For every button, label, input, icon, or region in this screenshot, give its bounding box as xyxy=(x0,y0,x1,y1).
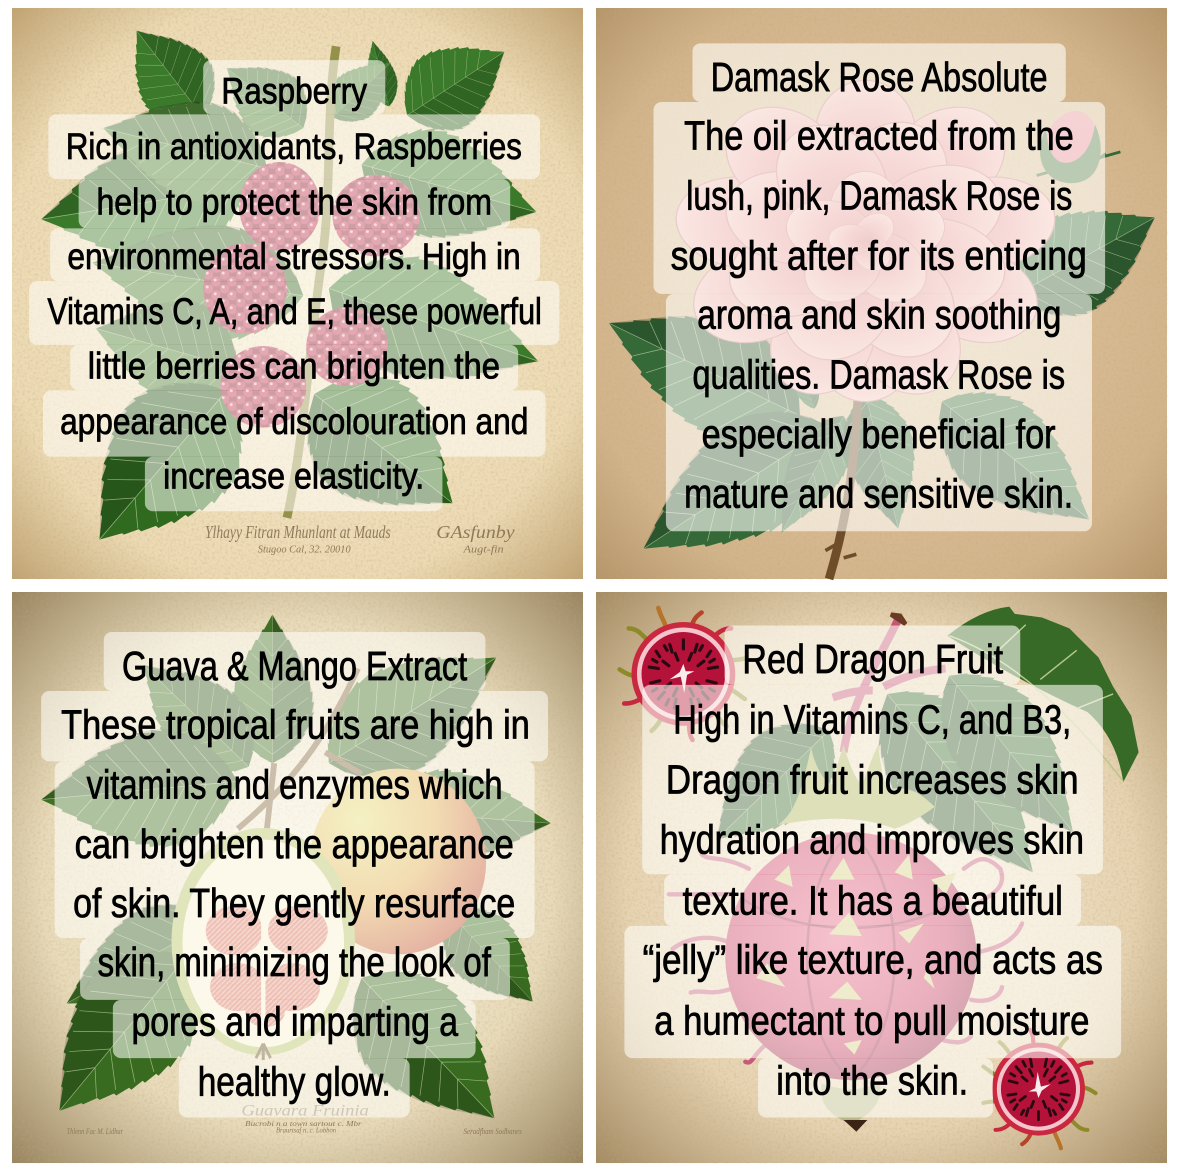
body text: raspberry: environmental stressors. High in xyxy=(67,235,521,277)
paper texture xyxy=(596,8,1167,579)
body text: damask rose: mature and sensitive skin. xyxy=(684,471,1073,517)
caption: plate inscription: Guavara Fruinia xyxy=(241,1103,369,1120)
caption: engraved signature xyxy=(205,522,516,555)
body text: red dragon fruit: Dragon fruit increases skin xyxy=(666,756,1079,802)
panel background: aged paper xyxy=(596,592,1167,1163)
panel background: aged paper xyxy=(12,592,583,1163)
body text: raspberry: Rich in antioxidants, Raspberries xyxy=(66,125,522,167)
body text: raspberry: increase elasticity. xyxy=(163,455,424,497)
caption: plate inscription: Bucrobi n a town sartout c. Mbr xyxy=(245,1120,362,1128)
body text: guava and mango: vitamins and enzymes which xyxy=(87,761,503,807)
body text: red dragon fruit xyxy=(643,696,1103,1104)
paper texture xyxy=(12,592,583,1163)
body text: red dragon fruit: “jelly” like texture, and acts as xyxy=(643,937,1103,983)
body text: damask rose: The oil extracted from the xyxy=(684,112,1074,158)
caption: plate inscription: Thlenn Fac M. Lidhur xyxy=(67,1126,124,1136)
caption: plate inscription xyxy=(67,1103,522,1136)
body text: damask rose: sought after for its enticing xyxy=(671,232,1087,278)
body text: raspberry: help to protect the skin from xyxy=(96,180,492,222)
paper texture xyxy=(596,592,1167,1163)
body text: raspberry xyxy=(47,125,542,497)
panel: red dragon fruit xyxy=(596,592,1167,1163)
illustration: guava and mango branch xyxy=(13,612,560,1158)
body text: damask rose: aroma and skin soothing xyxy=(697,291,1061,337)
body text: damask rose: qualities. Damask Rose is xyxy=(693,352,1065,398)
body text: red dragon fruit: hydration and improves skin xyxy=(660,816,1084,862)
illustration: damask rose xyxy=(584,80,1179,597)
heading: Guava & Mango Extract: Guava & Mango Extract xyxy=(122,643,468,689)
body text: guava and mango: healthy glow. xyxy=(198,1058,391,1104)
caption: engraved signature: Ylhayy Fitran Mhunlant at Mauds xyxy=(205,522,391,542)
paper texture xyxy=(12,8,583,579)
panel: damask rose xyxy=(584,8,1179,597)
heading: Red Dragon Fruit: Red Dragon Fruit xyxy=(742,636,1004,682)
body text: raspberry: appearance of discolouration and xyxy=(60,400,528,442)
body text: damask rose xyxy=(671,112,1087,517)
body text: guava and mango xyxy=(61,702,530,1104)
body text: red dragon fruit: High in Vitamins C, and B3, xyxy=(673,696,1071,742)
caption: engraved signature: GAsfunby xyxy=(436,522,516,542)
body text: red dragon fruit: a humectant to pull moisture xyxy=(654,997,1089,1043)
body text: red dragon fruit: into the skin. xyxy=(776,1058,968,1104)
body text: damask rose: especially beneficial for xyxy=(702,411,1056,457)
body text: raspberry: little berries can brighten the xyxy=(88,345,500,387)
caption: engraved signature: Augt-fin xyxy=(462,544,504,555)
body text: guava and mango: These tropical fruits are high in xyxy=(61,702,530,748)
panel background: tan paper xyxy=(596,8,1167,579)
caption: engraved signature: Stugoo Cal, 32. 20010 xyxy=(258,544,351,555)
heading: Damask Rose Absolute: Damask Rose Absolute xyxy=(711,54,1048,100)
text highlight backing xyxy=(41,632,548,1117)
body text: guava and mango: pores and imparting a xyxy=(131,999,458,1045)
text highlight backing xyxy=(29,60,559,511)
text highlight backing xyxy=(624,626,1121,1117)
body text: guava and mango: of skin. They gently resurface xyxy=(73,880,515,926)
panel: guava and mango xyxy=(12,592,583,1163)
caption: plate inscription: Seradfham Sodbanes xyxy=(464,1126,522,1136)
body text: red dragon fruit: texture. It has a beautiful xyxy=(683,877,1063,923)
panel background: aged paper xyxy=(12,8,583,579)
heading: Raspberry: Raspberry xyxy=(221,69,367,111)
body text: guava and mango: can brighten the appearance xyxy=(75,821,514,867)
body text: raspberry: Vitamins C, A, and E, these powerful xyxy=(47,290,542,332)
text highlight backing xyxy=(654,43,1105,531)
caption: plate inscription: Braurtsaf n, c. Lobbon xyxy=(276,1126,336,1134)
panel: raspberry xyxy=(12,7,583,582)
illustration: raspberry branch xyxy=(31,7,558,582)
body text: damask rose: lush, pink, Damask Rose is xyxy=(686,172,1072,218)
illustration: dragon fruit xyxy=(620,607,1139,1148)
body text: guava and mango: skin, minimizing the look of xyxy=(98,939,491,985)
